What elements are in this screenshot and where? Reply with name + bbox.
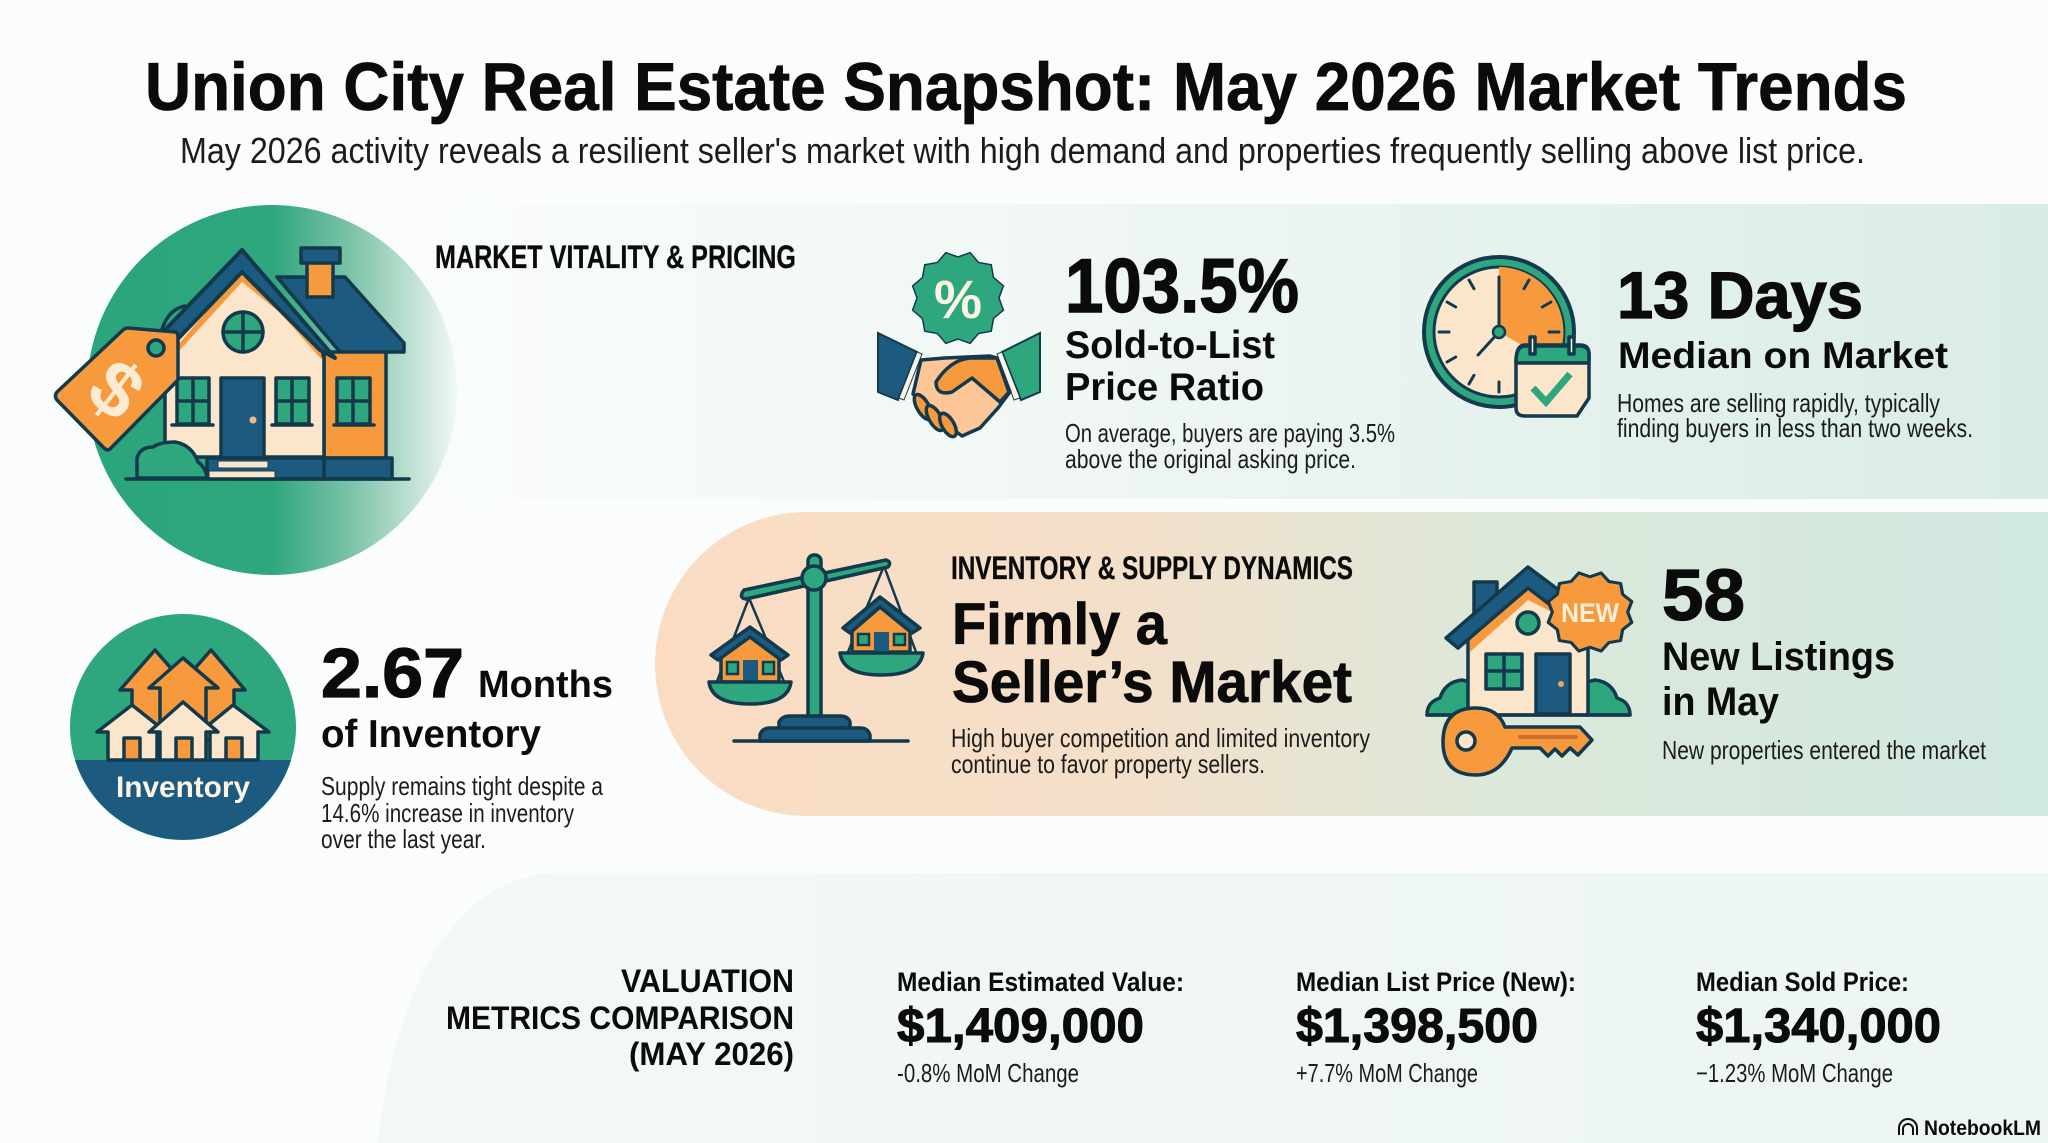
- icon: inventory houses badge: [70, 614, 296, 840]
- stat: sold-to-list ratio: Sold-to-List: [1065, 324, 1275, 367]
- icon: clock and calendar: [1424, 257, 1589, 416]
- stat: median days on market: Median on Market: [1618, 335, 1948, 376]
- metric: median estimated value: -0.8% MoM Change: [897, 1058, 1079, 1088]
- stat: months of inventory: Months: [478, 664, 613, 706]
- panel: market vitality band: [425, 204, 2048, 499]
- stat: months of inventory: 14.6% increase in inventory: [321, 798, 574, 828]
- icon: percent badge and handshake: %: [934, 270, 982, 330]
- metric: median estimated value: [897, 967, 1184, 1088]
- heading: market vitality: MARKET VITALITY & PRICING: [435, 239, 796, 275]
- metric: median estimated value: Median Estimated Value:: [897, 967, 1184, 997]
- icon: percent badge and handshake: [878, 240, 1040, 439]
- left pan with house: [709, 627, 791, 704]
- heading and verdict: seller's market: Seller’s Market: [952, 650, 1352, 715]
- metric: median list price: [1296, 967, 1576, 1088]
- right pan with house: [840, 597, 923, 675]
- metric: median sold price: −1.23% MoM Change: [1696, 1058, 1893, 1088]
- heading and verdict: seller's market: continue to favor property sellers.: [951, 749, 1265, 779]
- metric: median sold price: [1696, 967, 1941, 1088]
- stat: months of inventory: [321, 634, 613, 854]
- stat: median days on market: [1617, 258, 1973, 443]
- heading: valuation metrics comparison: METRICS COMPARISON: [446, 1000, 794, 1036]
- metric: median sold price: $1,340,000: [1696, 1000, 1941, 1053]
- stat: months of inventory: 2.67: [321, 634, 464, 712]
- stat: median days on market: Homes are selling rapidly, typically: [1617, 388, 1940, 418]
- heading and verdict: seller's market: High buyer competition and limited inventory: [951, 723, 1370, 753]
- metric: median list price: Median List Price (New):: [1296, 967, 1576, 997]
- panel: inventory and supply band: [655, 512, 2048, 816]
- stat: months of inventory: over the last year.: [321, 824, 486, 854]
- stat: sold-to-list ratio: above the original asking price.: [1065, 444, 1356, 474]
- stat: months of inventory: of Inventory: [321, 713, 541, 756]
- stat: sold-to-list ratio: Price Ratio: [1065, 366, 1264, 409]
- icon: balance scale with houses: [709, 555, 923, 741]
- stat: sold-to-list ratio: 103.5%: [1065, 244, 1299, 329]
- heading: valuation metrics comparison: VALUATION: [621, 963, 794, 999]
- stat: new listings: in May: [1662, 680, 1780, 724]
- stat: new listings: 58: [1662, 556, 1745, 636]
- heading: valuation metrics comparison: [446, 963, 794, 1072]
- price tag: [56, 306, 185, 450]
- panel: valuation metrics: [378, 873, 2048, 1143]
- icon: new listing house and key: [1427, 562, 1643, 775]
- stat: new listings: New Listings: [1662, 635, 1895, 679]
- heading and verdict: seller's market: [951, 550, 1370, 779]
- stat: new listings: [1662, 556, 1987, 765]
- heading and verdict: seller's market: INVENTORY & SUPPLY DYNAMICS: [951, 550, 1353, 586]
- icon: inventory houses badge: Inventory: [116, 771, 250, 804]
- metric: median sold price: Median Sold Price:: [1696, 967, 1909, 997]
- subtitle: May 2026 activity reveals a resilient seller's market with high demand and properties frequently selling above list price.: [180, 130, 1865, 171]
- stat: median days on market: finding buyers in less than two weeks.: [1617, 413, 1973, 443]
- chimney: [301, 248, 340, 297]
- stat: sold-to-list ratio: [1065, 244, 1395, 474]
- logo: NotebookLM: NotebookLM: [1924, 1117, 2041, 1140]
- windows and door: [172, 378, 374, 458]
- icon: new listing house and key: NEW: [1561, 598, 1619, 628]
- stat: sold-to-list ratio: On average, buyers are paying 3.5%: [1065, 418, 1395, 448]
- icon: house with price tag: [56, 205, 457, 575]
- heading and verdict: seller's market: Firmly a: [952, 592, 1168, 657]
- stat: median days on market: 13 Days: [1617, 258, 1863, 332]
- metric: median list price: +7.7% MoM Change: [1296, 1058, 1478, 1088]
- metric: median list price: $1,398,500: [1296, 1000, 1538, 1053]
- price tag: $: [72, 341, 161, 437]
- stat: months of inventory: Supply remains tight despite a: [321, 771, 603, 801]
- metric: median estimated value: $1,409,000: [897, 1000, 1144, 1053]
- heading: valuation metrics comparison: (MAY 2026): [629, 1036, 794, 1072]
- title: Union City Real Estate Snapshot: May 2026 Market Trends: [145, 49, 1907, 125]
